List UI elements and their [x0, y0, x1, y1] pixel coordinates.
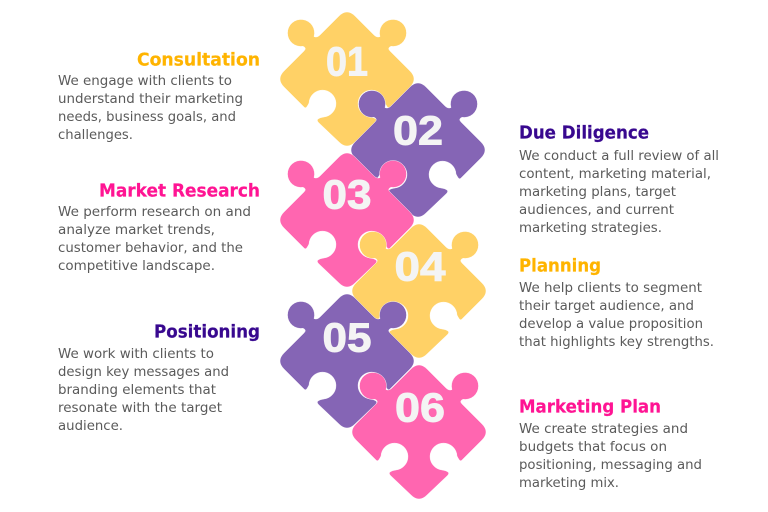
panel: positioning	[58, 322, 260, 434]
text block: market research	[58, 204, 251, 274]
text block: consultation	[58, 73, 243, 143]
text block: positioning: We work with clients to	[58, 346, 214, 362]
text block: positioning: design key messages and	[58, 364, 229, 380]
text block: due diligence: content, marketing material,	[519, 166, 711, 182]
text block: due diligence: marketing plans, target	[519, 184, 676, 200]
text block: marketing plan	[519, 421, 702, 491]
heading: planning: Planning	[519, 256, 601, 276]
heading: due diligence: Due Diligence	[519, 122, 649, 144]
text block: planning: that highlights key strengths.	[519, 334, 714, 350]
text block: due diligence: marketing strategies.	[519, 220, 662, 236]
panel: marketing plan	[519, 396, 702, 491]
text block: planning: develop a value proposition	[519, 316, 703, 332]
panel: consultation	[58, 50, 260, 143]
puzzle piece 06: 06	[395, 384, 445, 430]
puzzle piece 04	[352, 224, 486, 358]
puzzle piece 06	[352, 365, 486, 499]
text block: consultation: needs, business goals, and	[58, 109, 236, 125]
text block: positioning	[58, 346, 229, 434]
puzzle piece 02	[351, 83, 485, 217]
text block: marketing plan: budgets that focus on	[519, 439, 667, 455]
text block: due diligence: audiences, and current	[519, 202, 674, 218]
puzzle column	[280, 12, 486, 499]
text block: positioning: audience.	[58, 418, 123, 434]
text block: planning: their target audience, and	[519, 298, 694, 314]
text block: consultation: understand their marketing	[58, 91, 243, 107]
puzzle piece 03: 03	[322, 172, 372, 218]
text block: planning: We help clients to segment	[519, 280, 702, 296]
text block: consultation: challenges.	[58, 127, 133, 143]
text block: marketing plan: We create strategies and	[519, 421, 688, 437]
puzzle piece 05	[280, 294, 414, 428]
puzzle piece 01	[280, 12, 414, 146]
panel: planning	[519, 256, 714, 350]
heading: marketing plan: Marketing Plan	[519, 396, 661, 418]
text block: market research: customer behavior, and the	[58, 240, 243, 256]
text block: market research: We perform research on and	[58, 204, 251, 220]
puzzle piece 01: 01	[326, 38, 368, 84]
text block: due diligence: We conduct a full review of all	[519, 148, 719, 164]
heading: positioning: Positioning	[154, 322, 260, 342]
puzzle piece 05: 05	[322, 314, 372, 360]
puzzle piece 03	[280, 153, 414, 287]
text block: due diligence	[519, 148, 719, 236]
puzzle piece 04: 04	[394, 244, 446, 290]
text block: positioning: resonate with the target	[58, 400, 222, 416]
text block: consultation: We engage with clients to	[58, 73, 232, 89]
panel: due diligence	[519, 122, 719, 236]
text block: marketing plan: marketing mix.	[519, 475, 619, 491]
text block: marketing plan: positioning, messaging and	[519, 457, 702, 473]
text block: market research: competitive landscape.	[58, 258, 215, 274]
text block: planning	[519, 280, 714, 350]
text block: market research: analyze market trends,	[58, 222, 215, 238]
puzzle piece 02: 02	[393, 108, 443, 154]
heading: consultation: Consultation	[137, 50, 260, 70]
heading: market research: Market Research	[99, 180, 260, 202]
panel: market research	[58, 180, 260, 274]
text block: positioning: branding elements that	[58, 382, 216, 398]
